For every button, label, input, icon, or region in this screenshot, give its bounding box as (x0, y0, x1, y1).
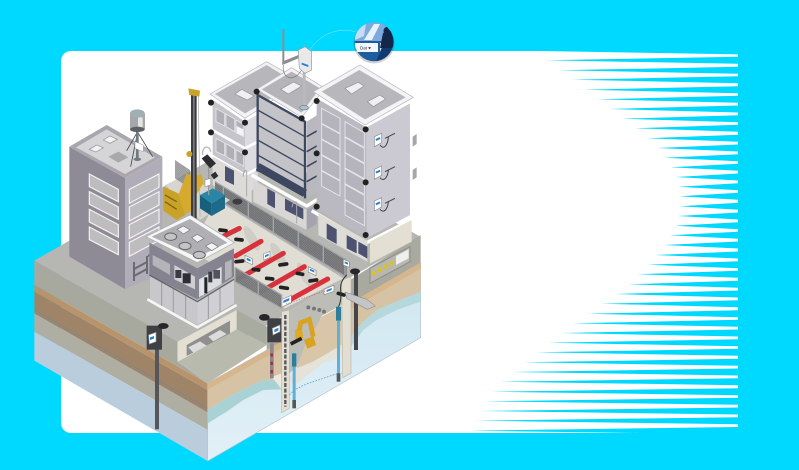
isometric ground block (34, 139, 421, 461)
bench (134, 254, 152, 281)
excavation pit with display niche (178, 310, 267, 383)
roof vents (89, 136, 117, 152)
dashed laser line (286, 290, 328, 304)
left soil layers (34, 261, 208, 461)
dark inclinometer pole (345, 268, 375, 350)
spiked right edge of card (471, 51, 738, 433)
tiltmeter cluster (306, 305, 326, 314)
excavation floor (190, 200, 343, 308)
excavation floor, fences and struts (190, 182, 349, 314)
middle building with dark panels (257, 68, 325, 198)
callout label: Dat ♥ (360, 46, 371, 50)
left sheet wall (282, 310, 289, 413)
callout detail circle (354, 22, 394, 64)
left face windows (89, 174, 118, 255)
drilling rig and site equipment (163, 88, 297, 223)
right tower (313, 65, 417, 238)
borehole sensor left (147, 323, 169, 429)
building anchor bolts (208, 89, 369, 238)
vent grilles (153, 255, 232, 281)
water tank (200, 188, 225, 216)
yellow excavator body (163, 187, 190, 220)
wireless strain sensors (245, 251, 349, 307)
small control building (146, 215, 237, 327)
right face windows (129, 174, 159, 256)
ground sensors and probes (147, 268, 375, 429)
back building (209, 62, 302, 208)
rig arm (178, 173, 203, 214)
mini excavator (291, 319, 316, 349)
lamp posts (243, 170, 297, 223)
buildings behind the excavation (208, 29, 417, 243)
roof vents on back buildings (235, 82, 302, 100)
small fence (175, 160, 190, 188)
red struts (224, 228, 328, 305)
manhole (232, 199, 242, 205)
strut brackets (220, 230, 344, 295)
control room window with people (174, 265, 222, 297)
right tower ground floor (318, 213, 412, 263)
roof vents (177, 226, 218, 251)
tower sensors (374, 133, 395, 211)
scanner on tripod (127, 109, 153, 167)
blue piezometer left (292, 353, 296, 408)
solar panel and logger (202, 147, 218, 195)
rig mast (186, 88, 200, 222)
right cross-section with groundwater (208, 235, 421, 461)
plinth of right tower (312, 211, 417, 243)
upper walls (149, 243, 197, 299)
ground surface (34, 139, 421, 359)
roof fans (165, 233, 205, 259)
left tall building (69, 109, 162, 289)
sensor at sheet wall with marked pole (259, 314, 281, 378)
white card (61, 51, 738, 433)
yard floor (165, 175, 230, 220)
floor shading (241, 224, 316, 289)
blue piezometer right (336, 275, 347, 382)
roof (146, 215, 234, 263)
tower windows (322, 108, 364, 226)
back fence (215, 182, 347, 277)
lower walls (150, 276, 197, 325)
right concrete wall (342, 277, 351, 378)
ground floor of middle building (252, 175, 317, 230)
front fence (235, 267, 282, 308)
rooftop antenna and gateway (282, 29, 356, 110)
